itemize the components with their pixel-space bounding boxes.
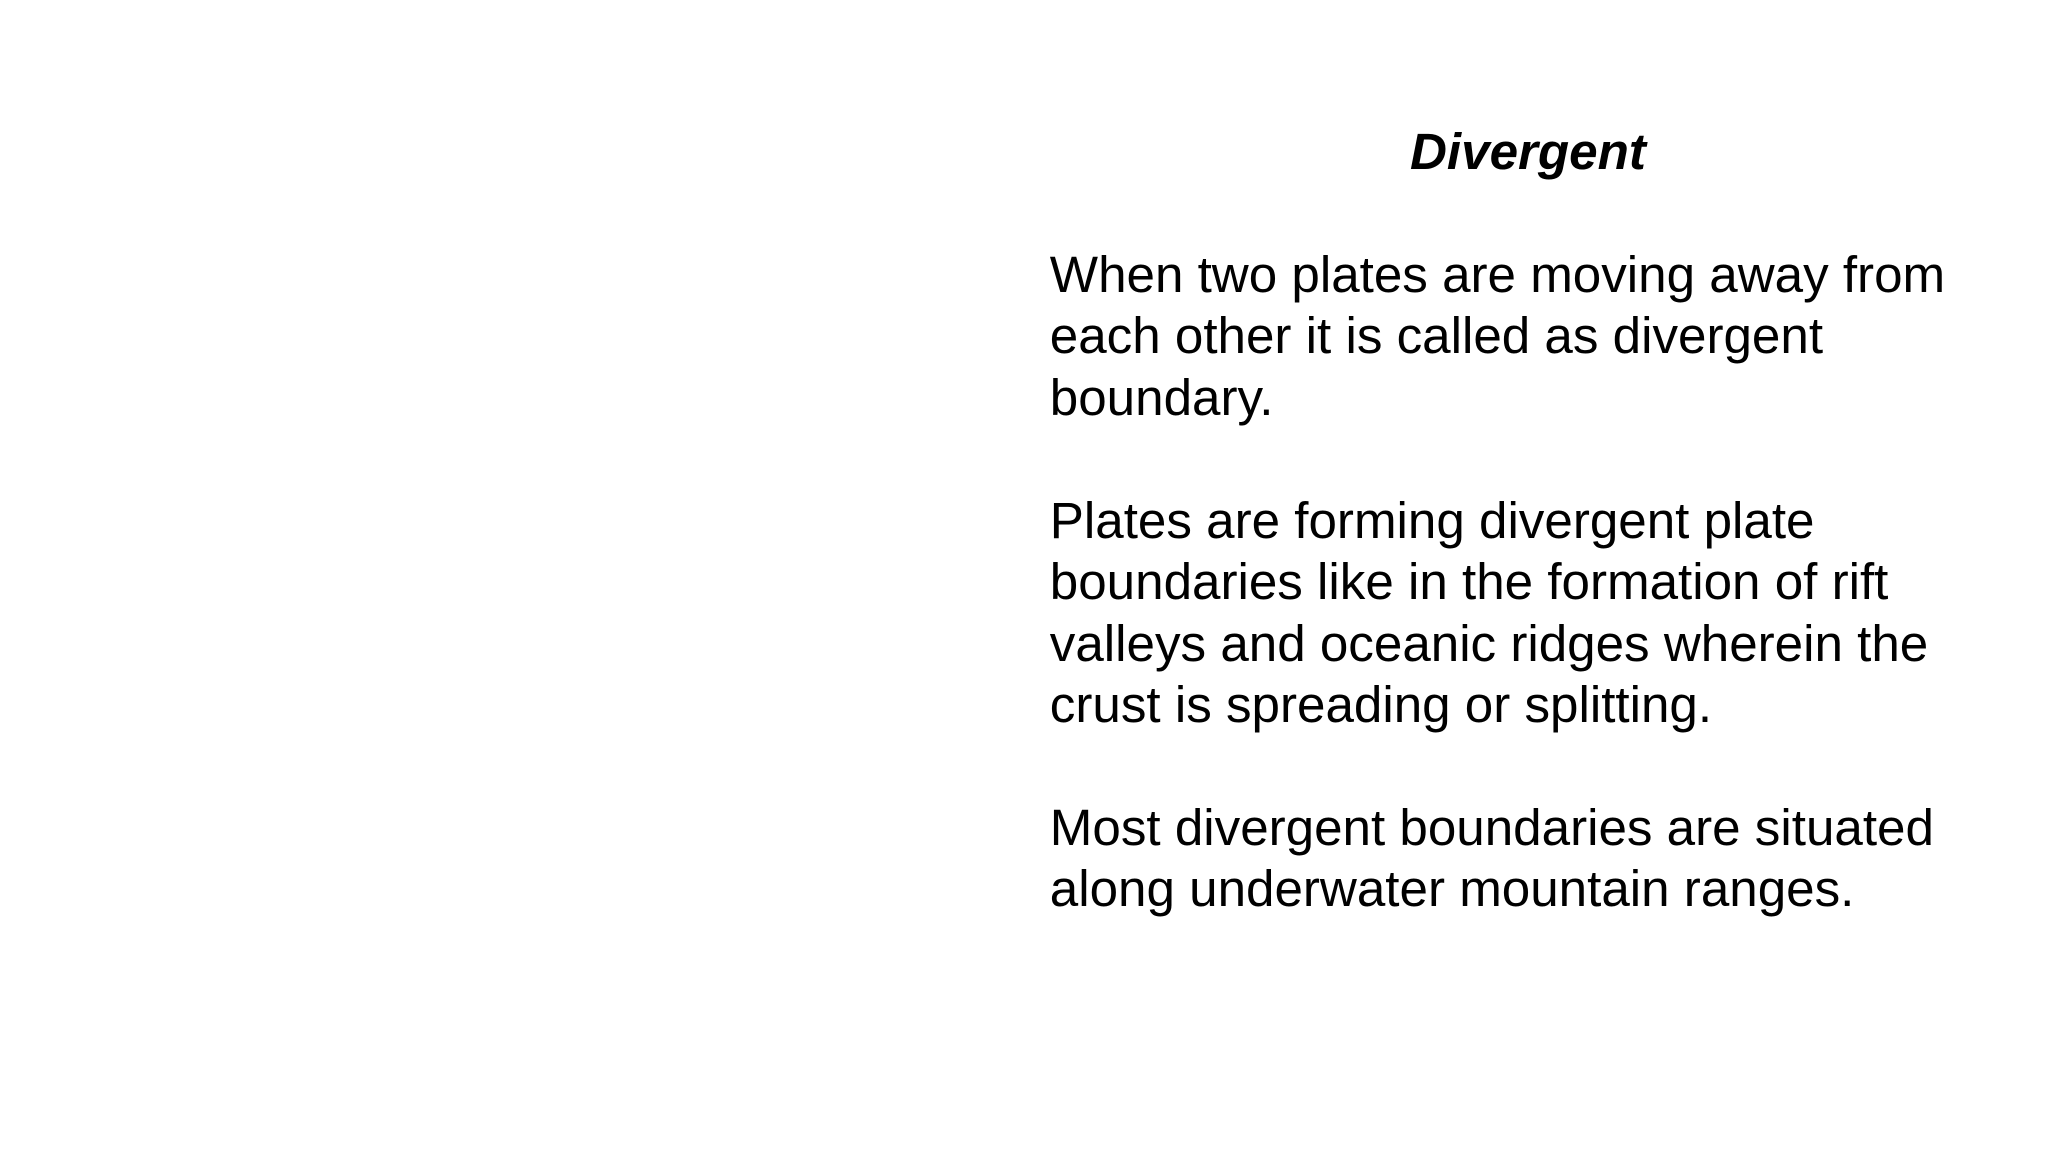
text block: location of divergent boundaries: along underwater mountain ranges. bbox=[1050, 860, 1854, 917]
text block: definition of divergent boundary: each other it is called as divergent bbox=[1050, 307, 1823, 364]
text block: formation of rift valleys and ridges: boundaries like in the formation of rift bbox=[1050, 553, 1888, 610]
text block: location of divergent boundaries bbox=[1050, 799, 1934, 917]
text block: location of divergent boundaries: Most divergent boundaries are situated bbox=[1050, 799, 1934, 856]
text block: definition of divergent boundary: When two plates are moving away from bbox=[1050, 246, 1945, 303]
text block: formation of rift valleys and ridges: valleys and oceanic ridges wherein the bbox=[1050, 615, 1928, 672]
text block: formation of rift valleys and ridges: crust is spreading or splitting. bbox=[1050, 676, 1712, 733]
text block: definition of divergent boundary bbox=[1050, 246, 1945, 426]
text block: formation of rift valleys and ridges: Plates are forming divergent plate bbox=[1050, 492, 1814, 549]
text block: definition of divergent boundary: boundary. bbox=[1050, 369, 1273, 426]
title: Divergent: Divergent bbox=[1410, 123, 1646, 180]
text block: formation of rift valleys and ridges bbox=[1050, 492, 1928, 733]
